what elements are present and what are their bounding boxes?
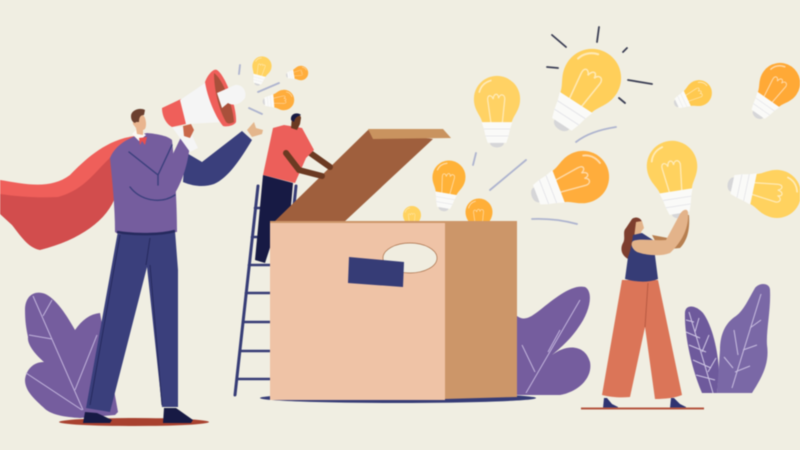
collar and tie <box>132 129 146 141</box>
bulb: small yellow emerging from box <box>403 206 421 234</box>
floor line <box>581 408 704 410</box>
red rim <box>205 70 236 126</box>
man on ladder: upper body <box>263 113 330 183</box>
hand on handle <box>183 124 194 138</box>
man on ladder: legs <box>255 175 293 263</box>
side face <box>445 222 517 399</box>
ladder <box>235 186 296 395</box>
bulb: orange emerging from box <box>466 198 492 240</box>
brown interior <box>214 73 234 124</box>
megaphone <box>162 70 246 152</box>
near arm <box>632 210 688 255</box>
white cone <box>180 81 225 124</box>
hair <box>291 113 301 122</box>
handle <box>172 127 198 152</box>
bulb: tiny orange near megaphone <box>285 65 309 83</box>
bulb: small yellow right <box>669 76 716 116</box>
bulb: small orange near megaphone <box>262 89 295 112</box>
plant: left of hero <box>25 293 118 418</box>
hand open <box>247 122 263 137</box>
box: lid <box>273 129 451 223</box>
light bulbs <box>248 38 800 240</box>
far arm <box>652 215 689 250</box>
bulb: orange above box <box>427 158 468 214</box>
red shirt <box>263 125 314 183</box>
plant: broad leaf <box>717 284 770 393</box>
trousers <box>86 231 178 412</box>
hair <box>131 109 145 123</box>
hair <box>621 218 642 260</box>
bulb: large yellow top <box>474 76 520 148</box>
head <box>133 114 146 135</box>
hero with cape and megaphone <box>0 70 263 426</box>
cape light <box>0 136 135 197</box>
bulb: yellow far right <box>723 160 800 222</box>
pants <box>602 280 682 399</box>
cardboard box <box>270 221 517 400</box>
sound burst <box>217 85 246 108</box>
top edge <box>270 221 517 224</box>
bulb: tiny yellow near megaphone <box>248 54 274 88</box>
cape dark <box>0 155 116 250</box>
raised arm <box>158 135 190 193</box>
front face <box>270 223 445 400</box>
head <box>291 114 301 130</box>
shoes <box>603 398 686 408</box>
waistband <box>117 231 175 234</box>
shoes <box>83 408 193 423</box>
bulb: orange far right <box>739 55 800 129</box>
bulb: yellow held by woman <box>643 137 705 222</box>
woman holding bulb <box>581 210 704 408</box>
rear red section <box>162 99 186 127</box>
dark tape label <box>348 257 404 287</box>
floor shadow <box>59 418 209 426</box>
hole <box>383 243 437 273</box>
far arm <box>183 131 252 186</box>
top <box>625 233 658 282</box>
head <box>634 221 644 238</box>
sweater folds <box>129 145 175 200</box>
plant: striped leaf <box>685 306 719 393</box>
sweater <box>110 133 177 234</box>
near arm <box>286 153 322 176</box>
box shadow <box>260 393 536 403</box>
motion dashes <box>239 27 652 224</box>
bulb: orange centre <box>522 143 617 221</box>
far arm <box>306 150 330 167</box>
plant: right of box <box>517 287 590 395</box>
bulb: largest yellow <box>534 38 632 145</box>
